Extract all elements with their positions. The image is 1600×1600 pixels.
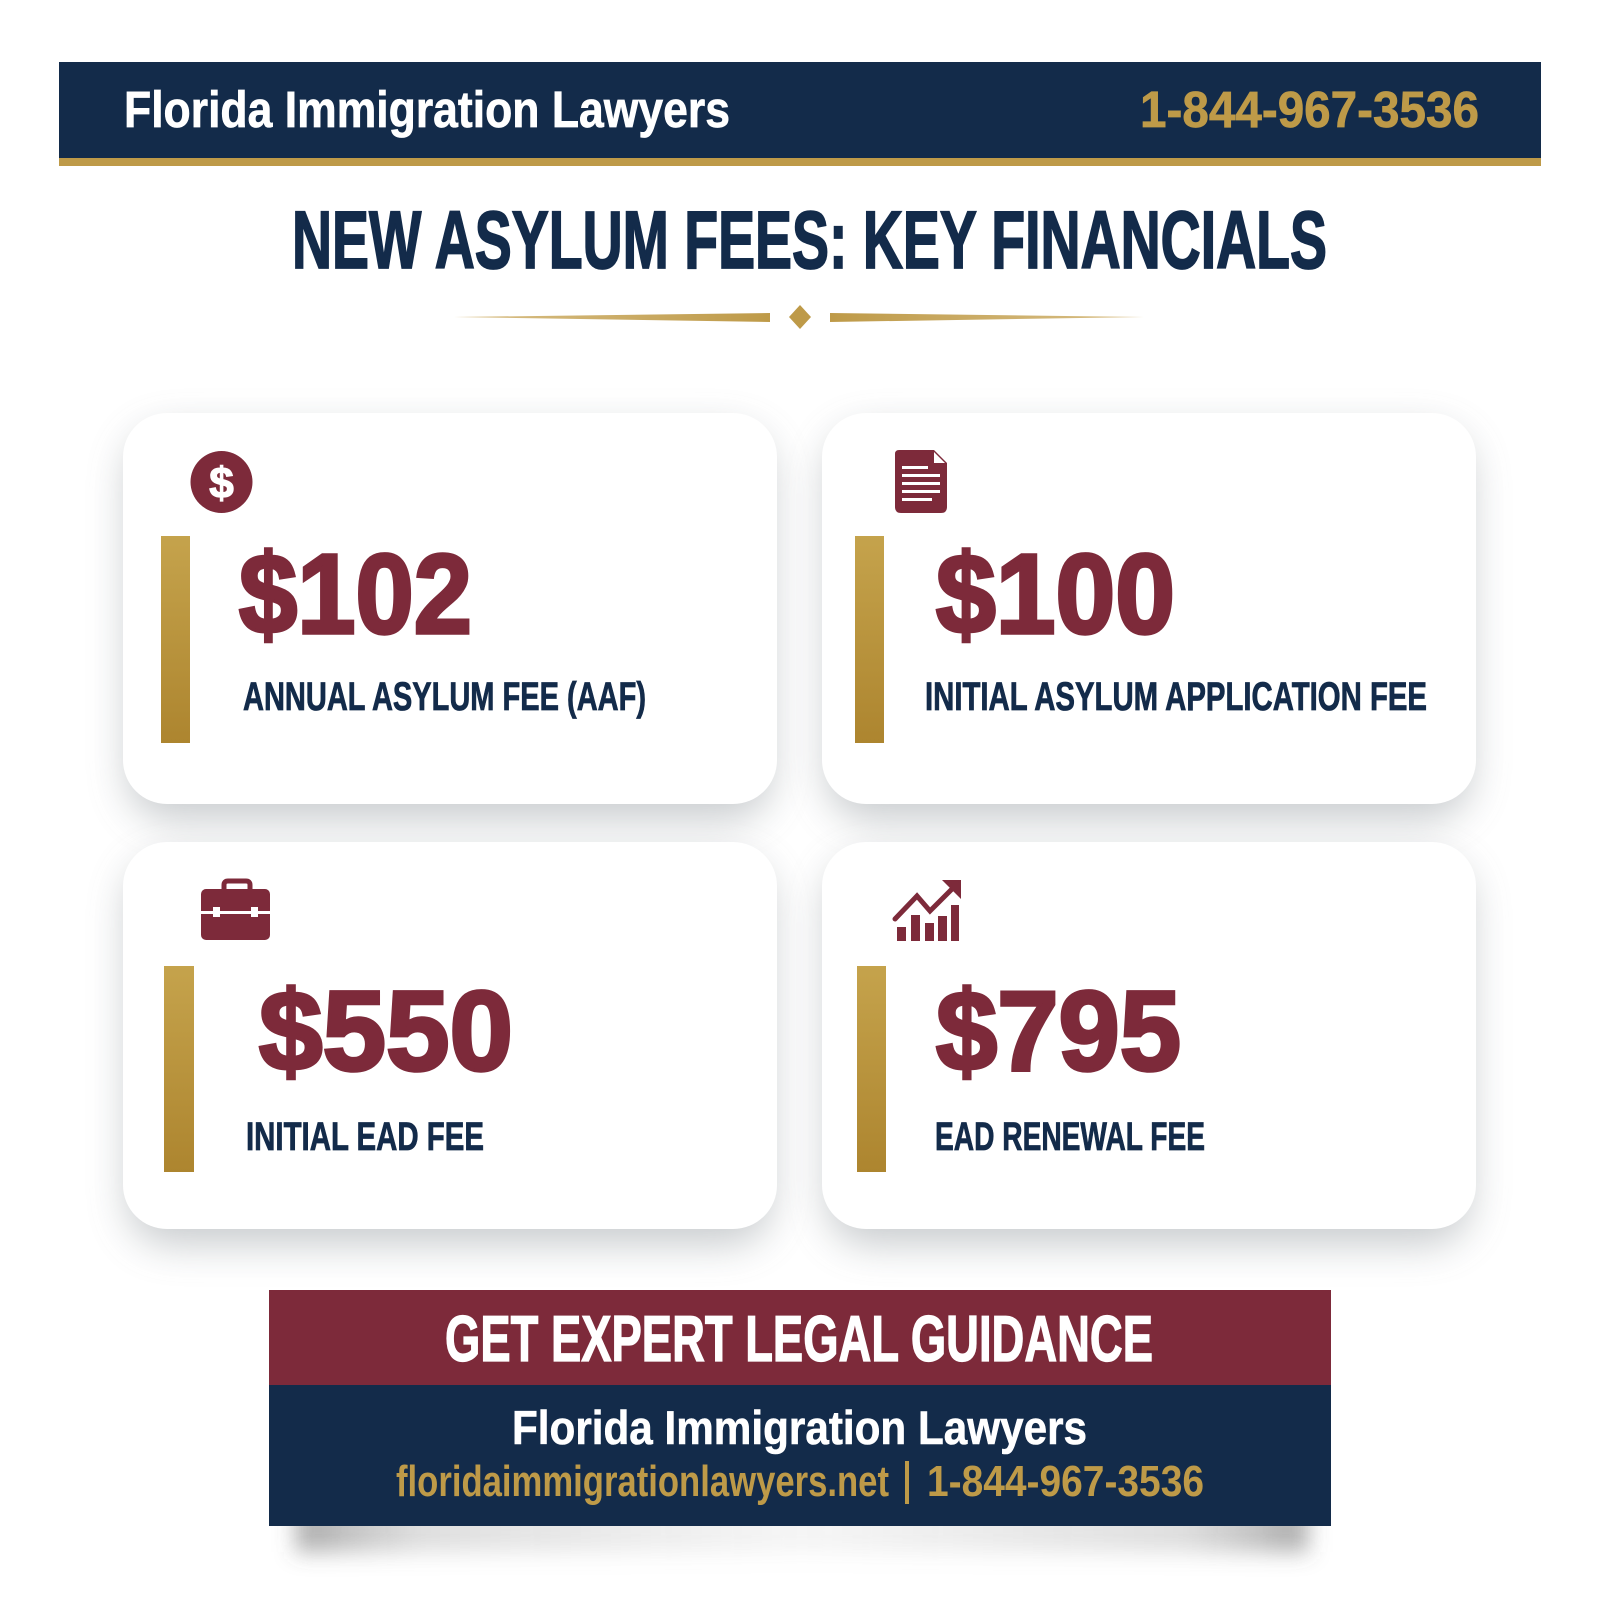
gold accent bar	[164, 966, 194, 1172]
banner website: floridaimmigrationlawyers.net	[396, 1457, 889, 1506]
header bar	[59, 62, 1541, 166]
icon: document	[895, 450, 947, 513]
title divider with diamond	[454, 305, 1146, 329]
label: INITIAL EAD FEE	[246, 1115, 484, 1159]
icon: rising chart	[895, 880, 961, 941]
label: INITIAL ASYLUM APPLICATION FEE	[925, 675, 1427, 719]
card: initial asylum application fee	[822, 413, 1476, 820]
banner phone number: 1-844-967-3536	[927, 1457, 1204, 1506]
card: EAD renewal fee	[822, 842, 1476, 1245]
card: initial EAD fee	[123, 842, 777, 1245]
icon: briefcase	[201, 881, 270, 940]
amount: $102	[239, 531, 472, 657]
gold accent bar	[857, 966, 886, 1172]
amount: $550	[259, 968, 513, 1094]
card: annual asylum fee	[123, 413, 777, 820]
banner heading: GET EXPERT LEGAL GUIDANCE	[445, 1302, 1153, 1375]
amount: $795	[936, 968, 1181, 1094]
header firm name: Florida Immigration Lawyers	[124, 81, 730, 138]
banner firm name: Florida Immigration Lawyers	[512, 1401, 1087, 1454]
label: ANNUAL ASYLUM FEE (AAF)	[243, 675, 646, 719]
icon: dollar coin	[190, 451, 252, 513]
banner separator	[905, 1461, 909, 1504]
gold accent bar	[855, 536, 884, 743]
amount: $100	[936, 531, 1175, 657]
call to action banner	[269, 1290, 1331, 1552]
label: EAD RENEWAL FEE	[935, 1115, 1205, 1159]
icon: dollar coin: $	[209, 459, 234, 508]
gold accent bar	[161, 536, 190, 743]
header phone number: 1-844-967-3536	[1140, 81, 1479, 138]
